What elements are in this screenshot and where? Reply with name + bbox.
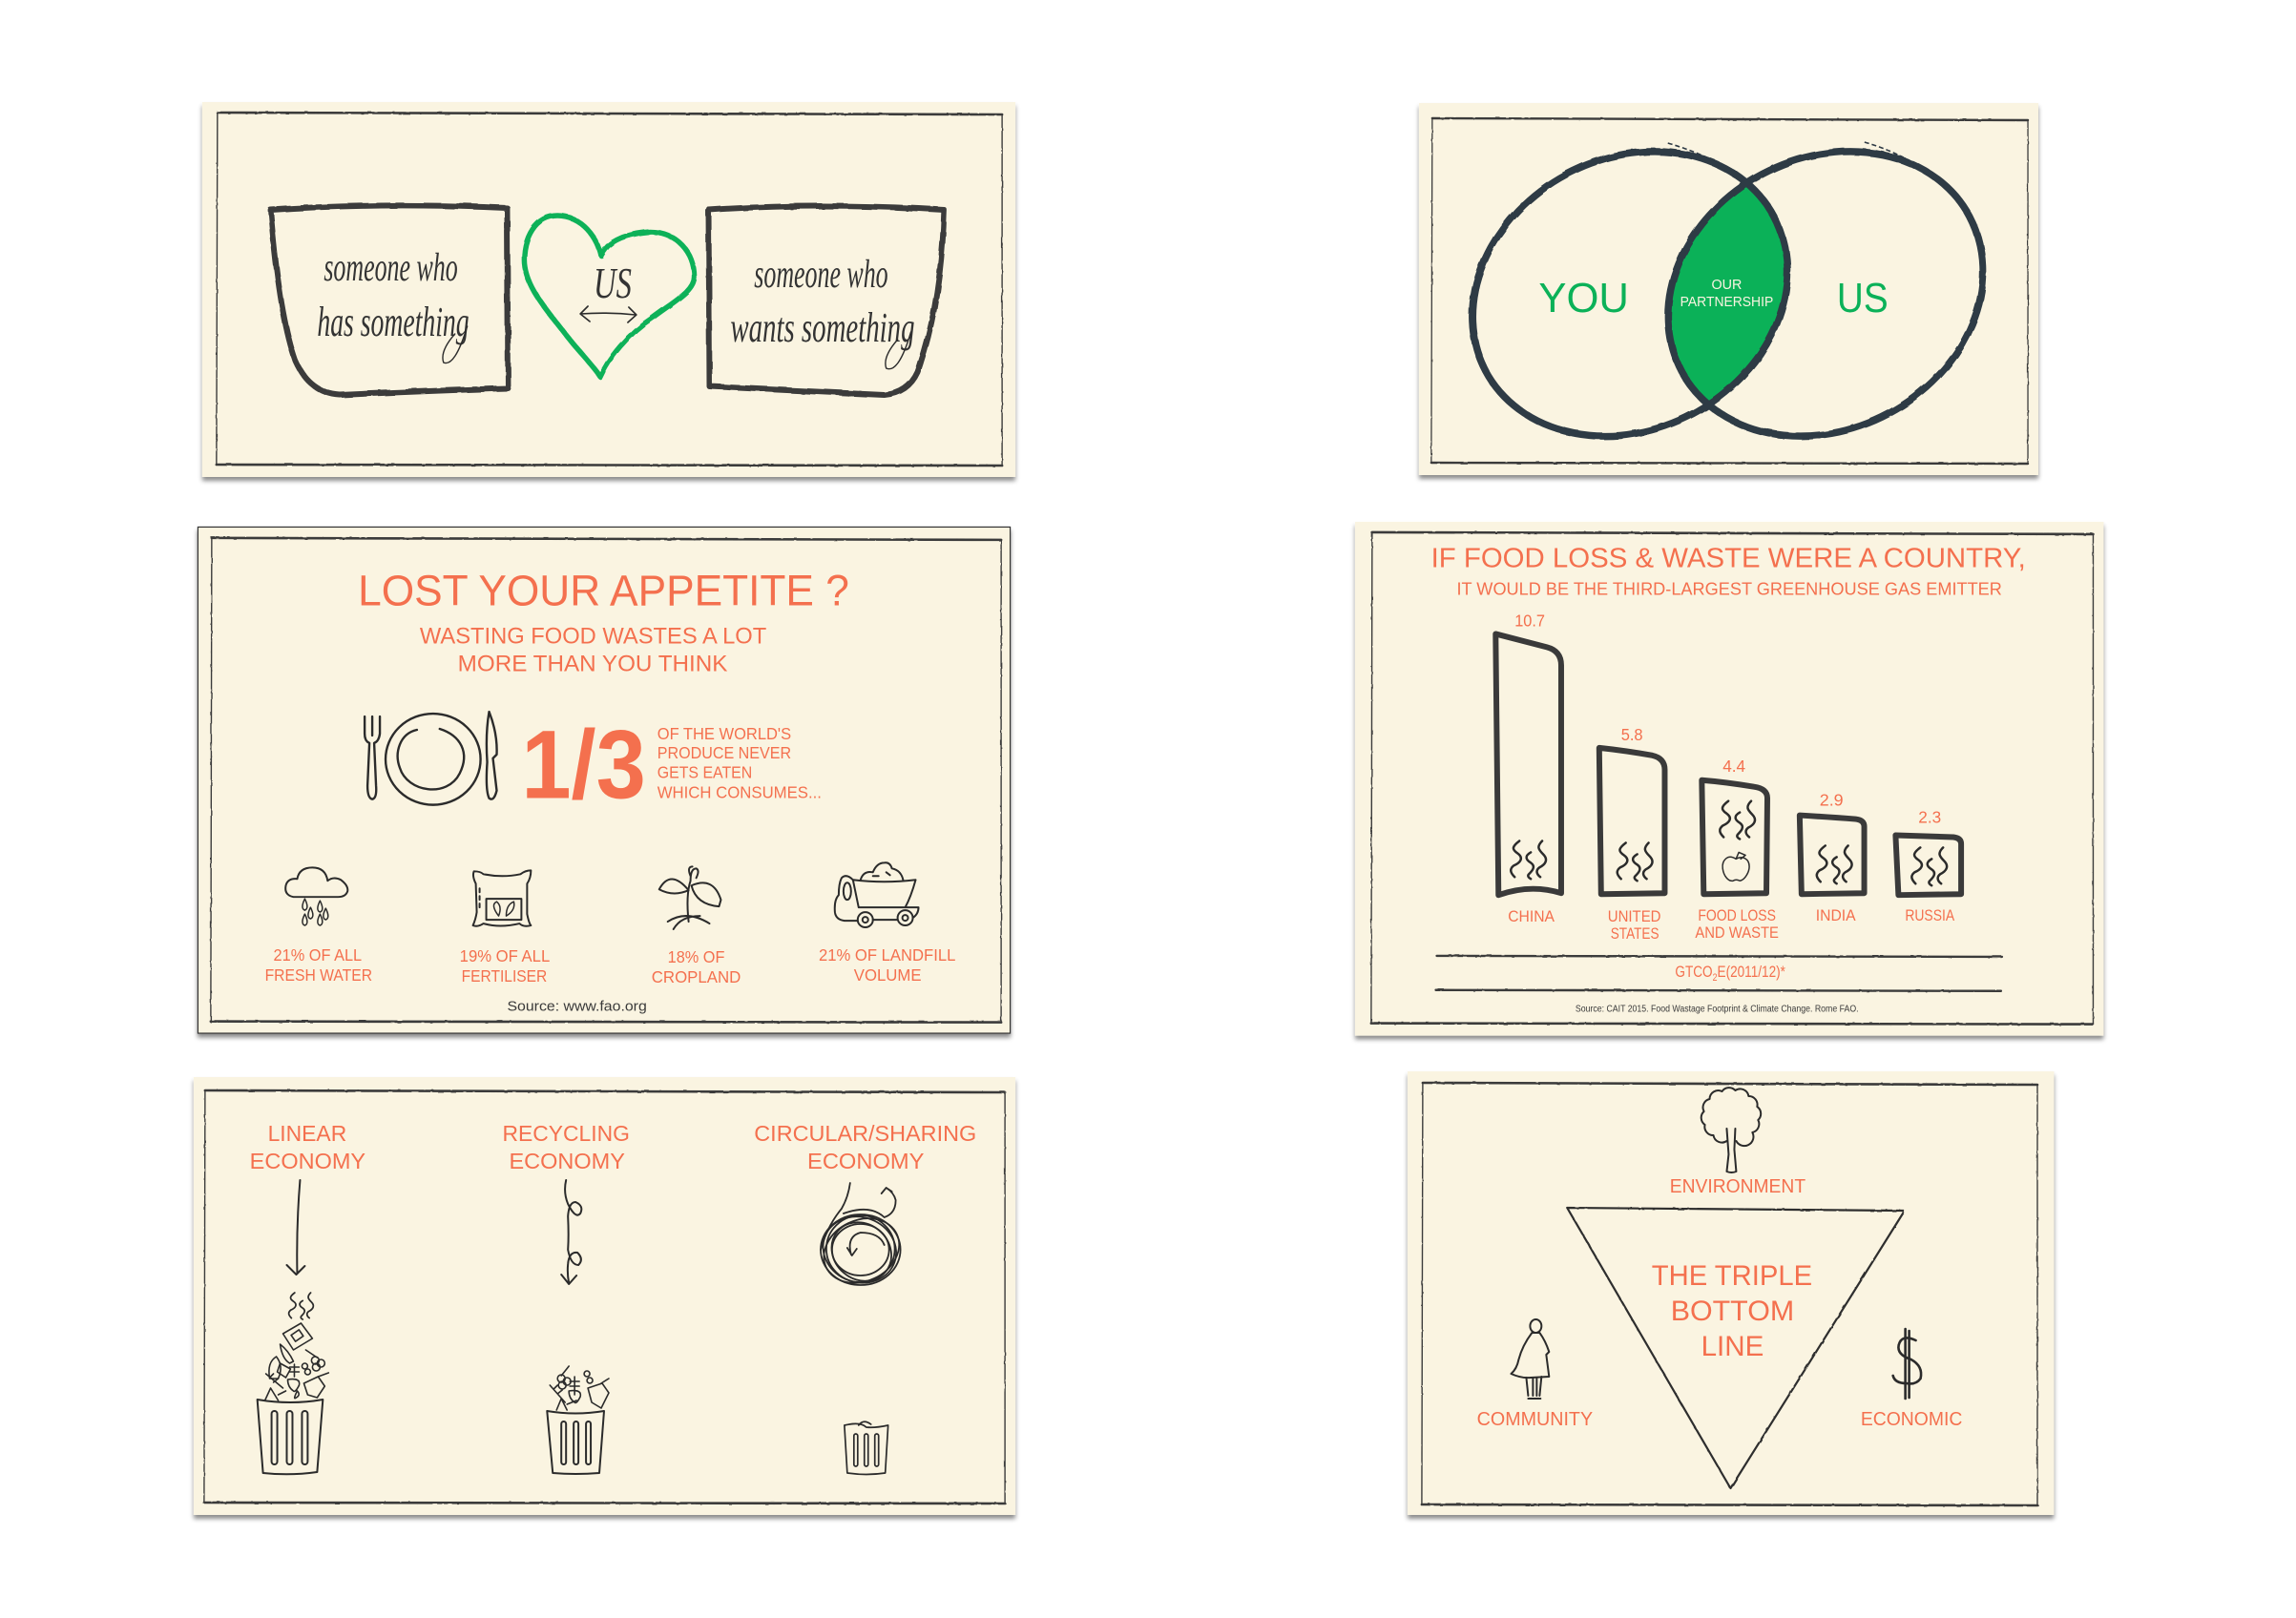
panel: triple bottom line [1408, 1071, 2054, 1515]
one third description: PRODUCE NEVER [657, 743, 791, 762]
left cup text: has something [317, 300, 470, 345]
heading circular economy: CIRCULAR/SHARING [754, 1121, 976, 1146]
label environment: ENVIRONMENT [1670, 1176, 1805, 1197]
unit label: GTCO [1675, 963, 1722, 981]
values: 10.7 [1514, 611, 1545, 630]
title [1652, 1260, 1812, 1362]
one third description: GETS EATEN [657, 763, 752, 782]
triangle [1567, 1208, 1904, 1488]
icon: stink lines [1511, 801, 1947, 885]
values: 4.4 [1722, 757, 1745, 776]
icon: small pile and medium bin [547, 1366, 609, 1474]
label our partnership: OUR [1712, 277, 1743, 293]
panel: you us venn diagram [1419, 97, 2038, 490]
unit label: E(2011/12)* [1718, 963, 1785, 981]
title: BOTTOM [1671, 1296, 1794, 1327]
country labels: RUSSIA [1905, 906, 1955, 924]
bars [1495, 633, 1961, 895]
title: IF FOOD LOSS & WASTE WERE A COUNTRY, [1431, 544, 2026, 574]
panel: someone who has something / us [202, 102, 1015, 477]
heading recycling economy [502, 1121, 630, 1173]
stat labels: CROPLAND [652, 967, 741, 986]
venn circles [1422, 97, 2034, 490]
heading linear economy: LINEAR [268, 1121, 346, 1146]
stat labels: 19% OF ALL [460, 946, 550, 965]
stat labels: 21% OF LANDFILL [819, 945, 955, 965]
panel: food loss and waste as a country [1355, 522, 2103, 1036]
heart label: US [594, 259, 632, 307]
values: 2.9 [1820, 791, 1844, 810]
panel: lost your appetite [198, 527, 1011, 1033]
arrow: straight [287, 1180, 304, 1275]
icon: double arrow [580, 306, 637, 322]
panel: economy types [194, 1077, 1015, 1515]
values: 5.8 [1621, 725, 1643, 744]
partnership lens [1672, 187, 1785, 401]
source: Source: www.fao.org [507, 999, 647, 1015]
subtitle: MORE THAN YOU THINK [458, 651, 727, 676]
icon: waste pile and large bin [258, 1293, 328, 1474]
icon: rain cloud [285, 867, 347, 925]
subtitle: WASTING FOOD WASTES A LOT [420, 623, 767, 649]
left cup shape [271, 205, 508, 395]
icon: person [1511, 1319, 1549, 1399]
right cup text: someone who [754, 253, 888, 297]
country labels: UNITED [1608, 907, 1661, 925]
right cup text [730, 253, 915, 369]
country labels: AND WASTE [1695, 923, 1779, 942]
values [1514, 611, 1941, 827]
stat labels [265, 945, 955, 986]
title: LOST YOUR APPETITE ? [358, 567, 849, 615]
left cup text [317, 246, 470, 363]
source: Source: CAIT 2015. Food Wastage Footprint & Climate Change. Rome FAO. [1576, 1005, 1859, 1015]
icon: tree [1701, 1088, 1761, 1172]
one third description: WHICH CONSUMES... [657, 783, 822, 802]
country labels: INDIA [1816, 906, 1856, 924]
green heart [524, 216, 695, 377]
label economic: ECONOMIC [1861, 1409, 1962, 1430]
heading recycling economy: RECYCLING [502, 1121, 630, 1146]
icon: fertiliser sack [473, 870, 531, 926]
values: 2.3 [1918, 808, 1941, 827]
heading circular economy: ECONOMY [807, 1149, 924, 1173]
stat labels: FERTILISER [462, 966, 547, 985]
one third description: OF THE WORLD'S [657, 724, 791, 743]
bar chart [1495, 611, 1961, 943]
stat labels: 21% OF ALL [274, 945, 362, 965]
arrow: two loops [561, 1180, 581, 1284]
icon: apple [1722, 852, 1749, 881]
stat labels: FRESH WATER [265, 965, 372, 985]
unit label: 2 [1713, 972, 1718, 984]
arrow: coil [813, 1183, 909, 1295]
label our partnership [1680, 277, 1773, 310]
label community: COMMUNITY [1477, 1409, 1593, 1430]
country labels: CHINA [1508, 907, 1555, 925]
right cup shape [709, 206, 944, 395]
label us: US [1837, 275, 1889, 322]
icon: fork plate knife [365, 712, 497, 805]
country labels [1508, 906, 1955, 943]
right cup text: wants something [730, 305, 915, 351]
country labels: FOOD LOSS [1698, 906, 1776, 924]
heading linear economy [250, 1121, 365, 1173]
one third description [657, 724, 822, 802]
heading recycling economy: ECONOMY [509, 1149, 625, 1173]
icon: small bin [845, 1421, 888, 1475]
icon: dollar sign [1893, 1329, 1921, 1399]
country labels: STATES [1611, 924, 1659, 943]
stat labels: VOLUME [854, 965, 922, 985]
heading circular economy [754, 1121, 976, 1173]
subtitle: IT WOULD BE THE THIRD-LARGEST GREENHOUSE GAS EMITTER [1456, 580, 2002, 600]
icon: dump truck [835, 862, 919, 927]
title: LINE [1701, 1331, 1764, 1362]
left cup text: someone who [324, 246, 458, 290]
subtitle [420, 623, 767, 676]
heading linear economy: ECONOMY [250, 1149, 365, 1173]
label you: YOU [1538, 275, 1629, 322]
big number one third: 1/3 [521, 710, 646, 819]
stat labels: 18% OF [668, 947, 724, 966]
label our partnership: PARTNERSHIP [1680, 294, 1773, 310]
title: THE TRIPLE [1652, 1260, 1812, 1292]
icon: sprout [659, 866, 720, 929]
